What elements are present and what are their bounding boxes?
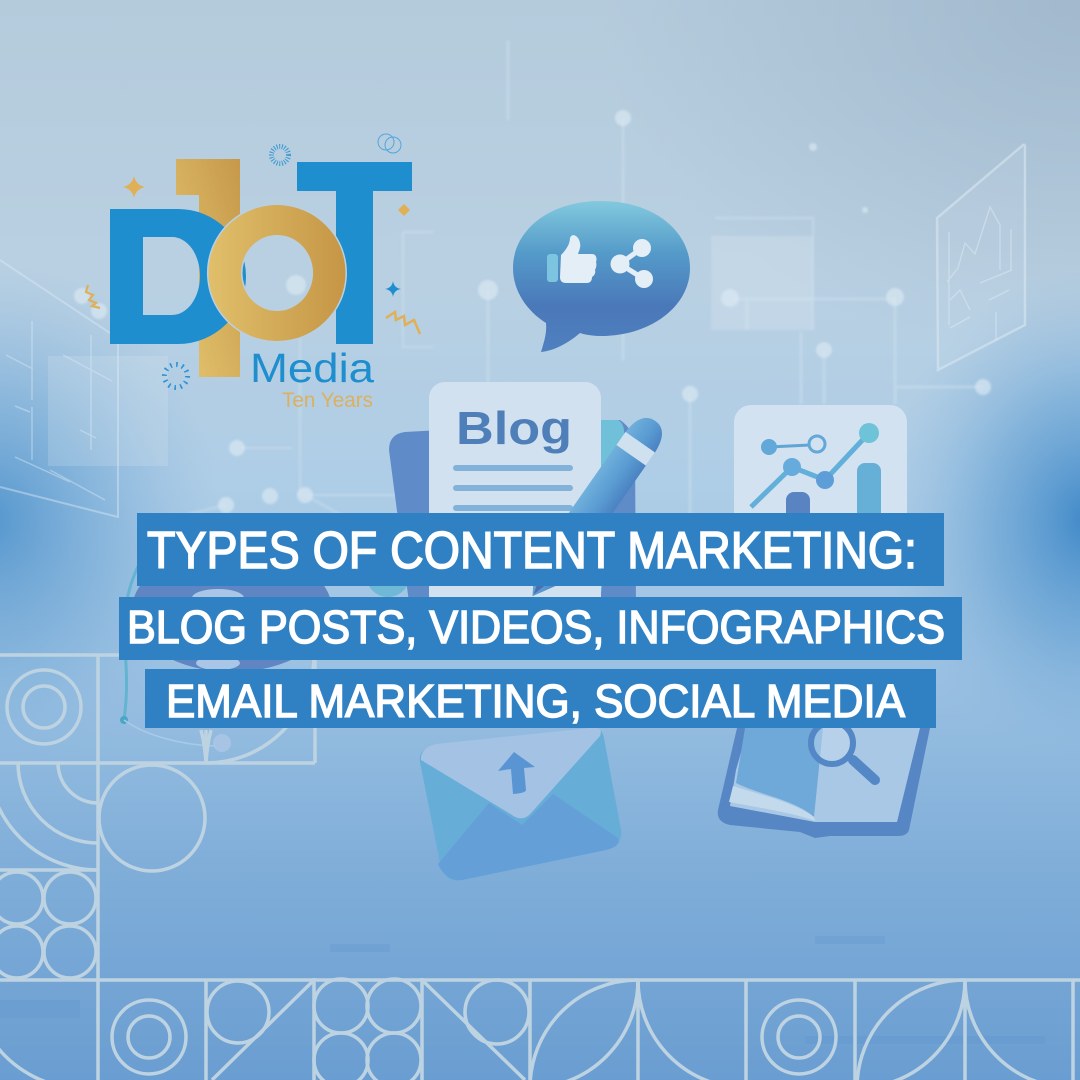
- magnifier: [811, 722, 875, 780]
- logo word Ten Years: Ten Years: [282, 389, 373, 412]
- icon: envelope with arrow: [420, 728, 621, 880]
- icon: share: [610, 239, 653, 288]
- icon: blog document with folder and pencil: [366, 382, 670, 622]
- folder behind document: [389, 420, 636, 610]
- logo letter D: [110, 209, 246, 344]
- title banner line 1: TYPES OF CONTENT MARKETING:: [147, 521, 917, 579]
- right holographic chart panel: [937, 145, 1025, 370]
- title banner line 3: EMAIL MARKETING, SOCIAL MEDIA: [166, 675, 905, 727]
- icon: social speech bubble with like and share: [513, 201, 690, 352]
- title banner line 2: BLOG POSTS, VIDEOS, INFOGRAPHICS: [127, 601, 945, 653]
- left holographic panel: [0, 260, 168, 517]
- geometric line pattern: left column: [0, 655, 315, 980]
- icon: thumbs up: [547, 235, 597, 283]
- floor shadows: [0, 936, 1045, 1044]
- pencil: [518, 411, 670, 607]
- document card: [429, 382, 601, 622]
- logo letter O: [208, 205, 345, 341]
- document card: Blog: [456, 402, 572, 454]
- icon: open book with magnifier: [718, 722, 930, 838]
- icon: circular blue shape behind title: [120, 528, 332, 752]
- logo numeral 1: [176, 159, 240, 377]
- logo decorations: [86, 134, 420, 388]
- logo letter T: [297, 162, 412, 344]
- icon: chart card: [734, 405, 907, 555]
- logo: 1DOT Media Ten Years: [86, 134, 420, 412]
- geometric line pattern: bottom row: [0, 978, 1080, 1080]
- background network lines and nodes: [74, 40, 991, 520]
- logo word Media: Media: [250, 345, 374, 391]
